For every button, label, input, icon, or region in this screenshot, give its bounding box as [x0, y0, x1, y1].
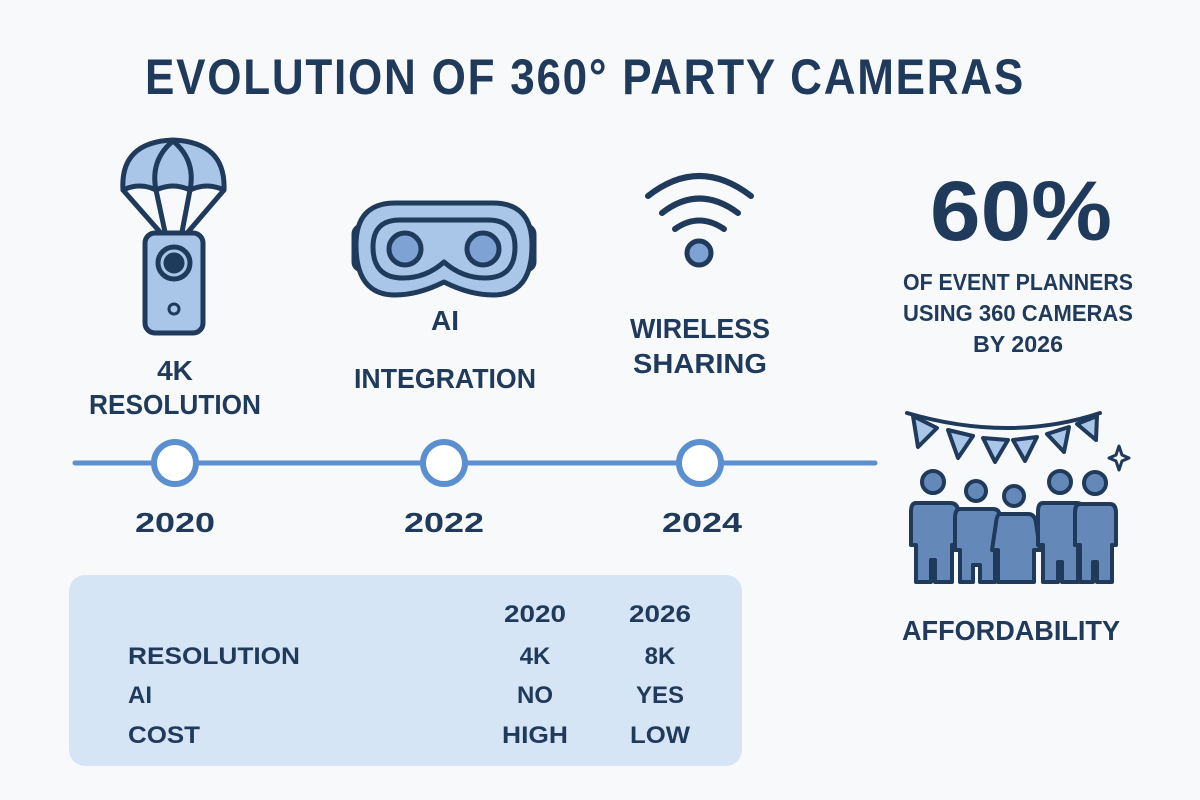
title: EVOLUTION OF 360° PARTY CAMERAS: [145, 49, 1025, 105]
label: 4K resolution: 4K: [157, 355, 193, 386]
stat: 60%: [903, 164, 1133, 357]
year labels: 2024: [662, 507, 743, 538]
stat: 60%: OF EVENT PLANNERS: [903, 269, 1133, 295]
stat: 60%: 60%: [930, 164, 1112, 258]
panel: comparison table: 2020: [504, 601, 566, 628]
panel: comparison table: 2026: [629, 601, 691, 628]
stat: 60%: USING 360 CAMERAS: [903, 300, 1133, 326]
year labels: [135, 507, 743, 538]
stat: 60%: BY 2026: [973, 331, 1063, 357]
panel: comparison table: COST: [128, 722, 200, 749]
label: AI integration: [354, 305, 536, 394]
icon: parachute camera: [123, 140, 224, 333]
label: 4K resolution: RESOLUTION: [89, 389, 261, 420]
panel: comparison table: 8K: [645, 643, 676, 670]
panel: comparison table: 4K: [520, 643, 551, 670]
panel: comparison table: RESOLUTION: [128, 643, 300, 670]
timeline: [75, 442, 875, 484]
year labels: 2020: [135, 507, 215, 538]
panel: comparison table: AI: [128, 682, 152, 709]
label: affordability: AFFORDABILITY: [902, 615, 1120, 646]
year labels: 2022: [404, 507, 484, 538]
label: 4K resolution: [89, 355, 261, 420]
panel: comparison table: YES: [636, 682, 684, 709]
icon: wifi: [648, 176, 751, 265]
label: AI integration: INTEGRATION: [354, 363, 536, 394]
label: wireless sharing: SHARING: [633, 348, 767, 379]
label: wireless sharing: [630, 313, 770, 379]
panel: comparison table: HIGH: [502, 722, 568, 749]
panel: comparison table: [69, 575, 742, 766]
label: wireless sharing: WIRELESS: [630, 313, 770, 344]
icon: party people with bunting: [907, 413, 1129, 582]
panel: comparison table: NO: [517, 682, 553, 709]
panel: comparison table: LOW: [630, 722, 690, 749]
label: AI integration: AI: [431, 305, 459, 336]
icon: VR goggles: [354, 203, 534, 295]
